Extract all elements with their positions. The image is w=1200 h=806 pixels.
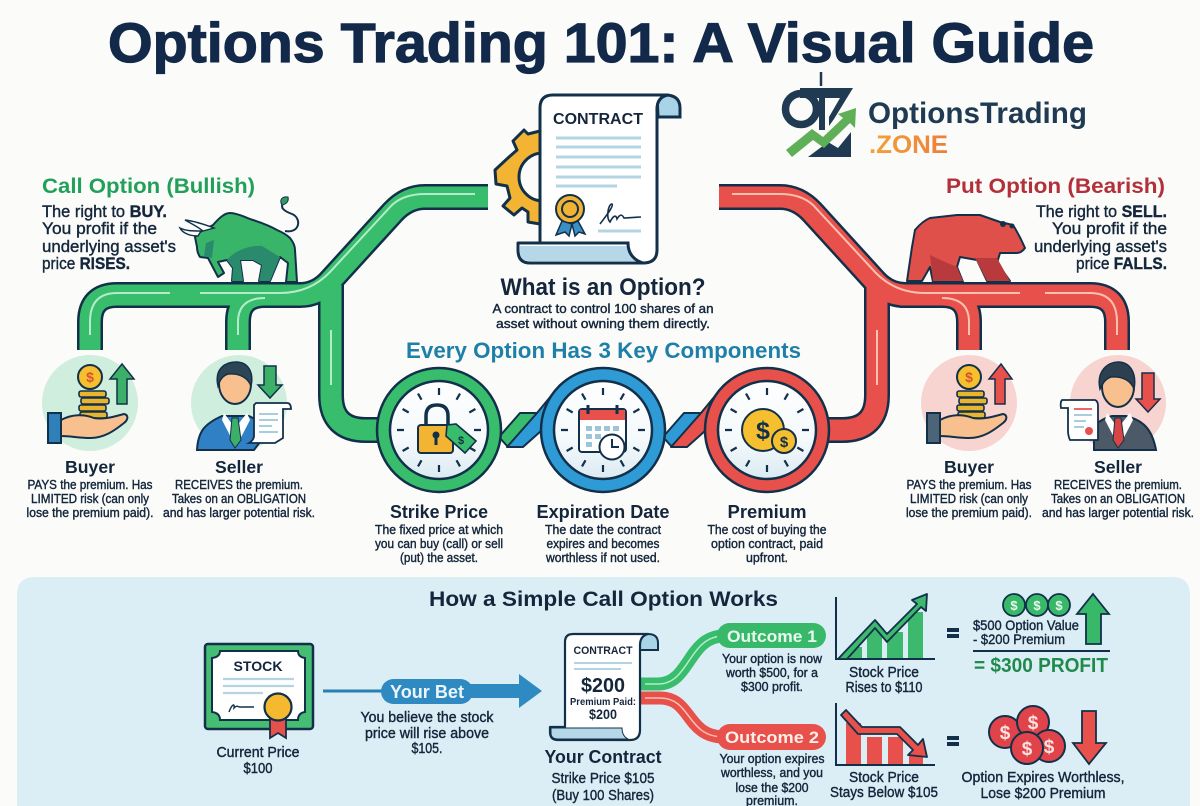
- panel: how a simple call option works: [17, 577, 1190, 806]
- label: stays below 105: [830, 770, 938, 801]
- text: outcome 2 description: Your option expires: [720, 752, 824, 766]
- icon: red coins: $: [1044, 737, 1055, 758]
- text: put seller description: [1042, 478, 1194, 520]
- icon: premium dial: $: [756, 417, 770, 445]
- icon: small contract: CONTRACT: [574, 645, 633, 657]
- text: premium description: [708, 523, 827, 565]
- text: premium description: option contract, paid: [711, 537, 823, 551]
- logo wordmark: OptionsTrading: [868, 97, 1087, 130]
- text: strike price description: The fixed price at which: [375, 523, 503, 537]
- chart: stock price rises: [836, 594, 935, 696]
- text: outcome 1 description: [722, 652, 823, 694]
- equals sign: outcome 2: [947, 736, 959, 746]
- logo zone: .ZONE: [869, 131, 948, 159]
- label: stays below 105: Stock Price: [849, 770, 919, 786]
- text: call buyer description: [26, 478, 154, 520]
- equals sign: outcome 1: [947, 628, 959, 638]
- badge: outcome 2: Outcome 2: [725, 728, 819, 747]
- icon: put buyer: $: [965, 369, 973, 385]
- pipes: put option red: [719, 194, 1117, 430]
- divider and profit result: = $300 PROFIT: [974, 655, 1108, 677]
- icon: strike price dial: $: [458, 435, 464, 447]
- text: strike price description: you can buy (call) or sell: [375, 537, 503, 551]
- label: expiration date: Expiration Date: [536, 502, 670, 522]
- outcome 2: [717, 724, 826, 806]
- heading: key components: Every Option Has 3 Key Components: [406, 338, 801, 363]
- icon: call buyer: $: [86, 369, 94, 385]
- icon: small contract: $200: [589, 707, 617, 722]
- heading: put option: Put Option (Bearish): [946, 175, 1165, 198]
- label: premium: Premium: [728, 502, 806, 522]
- your bet: [323, 674, 542, 757]
- label: call seller: Seller: [215, 457, 263, 477]
- text: expiration description: worthless if not used.: [545, 551, 660, 565]
- icon: gear and contract: [495, 95, 680, 263]
- label: put buyer: Buyer: [944, 457, 994, 477]
- text: call buyer description: LIMITED risk (can only: [31, 492, 150, 506]
- logo mark: [786, 72, 856, 157]
- label: put seller: Seller: [1094, 457, 1142, 477]
- text: expiration description: The date the contract: [545, 523, 662, 537]
- panel background: [17, 577, 1190, 806]
- text: outcome 1 description: $300 profit.: [741, 680, 803, 694]
- bars and trend arrow falling: [836, 703, 935, 765]
- label: call buyer: Buyer: [65, 457, 115, 477]
- pipes: call option green: [90, 194, 488, 430]
- bars and trend arrow rising: [836, 594, 935, 659]
- icon: call buyer: [42, 355, 138, 451]
- icon: bear: [907, 215, 1025, 282]
- icon: put buyer: [921, 355, 1017, 451]
- profit calculation: [973, 594, 1110, 677]
- badge: outcome 1: Outcome 1: [727, 627, 817, 646]
- arrow: your bet: Your Bet: [390, 682, 464, 702]
- text: current price: Current Price: [216, 745, 300, 761]
- text: put seller description: and has larger potential risk.: [1042, 506, 1194, 520]
- text: call option description: price RISES.: [42, 254, 130, 273]
- text: outcome 2 description: [720, 752, 824, 806]
- text: call buyer description: lose the premium paid).: [26, 506, 154, 520]
- icon: red coins: $: [1028, 713, 1039, 734]
- text: call seller description: [163, 478, 315, 520]
- outcome pipes: [640, 636, 724, 737]
- icon: red coins: $: [1000, 723, 1011, 744]
- component: strike price: [375, 368, 503, 565]
- label: rises to 110: Stock Price: [849, 665, 919, 681]
- text: call seller description: Takes on an OBLIGATION: [172, 492, 306, 506]
- text: put option description: price FALLS.: [1076, 254, 1167, 273]
- text: strike price description: [375, 523, 503, 565]
- text: expiration description: [545, 523, 662, 565]
- text: outcome 2 description: worthless, and you: [720, 766, 823, 780]
- label: rises to 110: Rises to $110: [846, 680, 922, 696]
- text: call option description: The right to BUY.: [42, 202, 167, 221]
- arrow: profit up: [1077, 594, 1109, 644]
- icon: put seller: [1061, 355, 1166, 451]
- text: your bet description: [360, 710, 494, 757]
- text: calculation: - $200 Premium: [973, 631, 1065, 647]
- text: strike details: Strike Price $105: [552, 771, 654, 787]
- text: call option description: You profit if the: [42, 219, 157, 238]
- text: your bet description: price will rise above: [365, 726, 489, 742]
- icon: stock certificate: STOCK: [234, 658, 282, 674]
- text: put buyer description: LIMITED risk (can only: [910, 492, 1029, 506]
- text: calculation: [973, 617, 1079, 647]
- call seller: [163, 355, 315, 520]
- heading: what is an option: What is an Option?: [500, 274, 706, 301]
- text: your bet description: $105.: [412, 741, 442, 757]
- text: premium description: upfront.: [746, 551, 788, 565]
- heading: how it works: How a Simple Call Option Works: [429, 588, 778, 611]
- outcome 1: [717, 623, 826, 694]
- text: put buyer description: PAYS the premium. Has: [906, 478, 1032, 492]
- text: your bet description: You believe the stock: [360, 710, 494, 726]
- arrow: loss down: [1073, 711, 1106, 764]
- text: put option description: underlying asset's: [1034, 237, 1167, 256]
- icon: gear: [495, 130, 567, 224]
- text: loss result: Lose $200 Premium: [980, 785, 1106, 802]
- icon: red coins: $: [1022, 739, 1033, 760]
- label: your contract: Your Contract: [544, 747, 662, 767]
- put buyer: [906, 355, 1032, 520]
- text: call seller description: and has larger potential risk.: [163, 506, 315, 520]
- connector bands between components: [499, 385, 742, 447]
- text: put seller description: Takes on an OBLIGATION: [1051, 492, 1185, 506]
- text: current price: $100: [244, 761, 272, 777]
- text: call option description: underlying asset's: [42, 237, 176, 256]
- icon: green coins: [1003, 594, 1070, 616]
- icon: strike price dial: [377, 368, 501, 492]
- icon: expiration dial: [541, 368, 665, 492]
- icon: contract document: CONTRACT: [553, 111, 644, 128]
- panel: put option text: [946, 175, 1167, 273]
- text: definition: asset without owning them directly.: [496, 316, 710, 331]
- text: premium description: The cost of buying the: [708, 523, 827, 537]
- label: stays below 105: Stays Below $105: [830, 785, 938, 801]
- chart: stock price falls: [830, 703, 938, 801]
- text: put buyer description: [906, 478, 1032, 520]
- text: put buyer description: lose the premium paid).: [906, 506, 1032, 520]
- text: put option description: You profit if the: [1052, 219, 1167, 238]
- title: Options Trading 101: A Visual Guide: [108, 11, 1094, 74]
- panel: call option text: [42, 175, 255, 273]
- your contract: [544, 634, 662, 804]
- call buyer: [26, 355, 154, 520]
- text: strike details: (Buy 100 Shares): [552, 788, 654, 804]
- text: outcome 2 description: lose the $200: [736, 781, 809, 795]
- text: current price: [216, 745, 300, 777]
- icon: premium dial: $: [780, 434, 789, 451]
- text: call option description: [42, 202, 176, 273]
- icon: bull: [180, 197, 298, 282]
- component: premium: [705, 368, 829, 565]
- text: definition: A contract to control 100 shares of an: [492, 301, 714, 316]
- text: loss result: [962, 769, 1124, 802]
- loss result: [962, 706, 1124, 802]
- text: calculation: $500 Option Value: [973, 617, 1079, 633]
- icon: premium dial: [705, 368, 829, 492]
- text: strike details: [552, 771, 654, 804]
- icon: green coins: $: [1033, 598, 1041, 613]
- text: what is an option: [492, 274, 714, 331]
- label: rises to 110: [846, 665, 922, 696]
- icon: small contract: Premium Paid:: [570, 696, 636, 708]
- logo: [786, 72, 1087, 159]
- stock certificate: [205, 644, 313, 777]
- component: expiration date: [536, 368, 670, 565]
- text: loss result: Option Expires Worthless,: [962, 769, 1124, 786]
- text: definition: [492, 301, 714, 331]
- icon: green coins: $: [1010, 598, 1018, 613]
- text: put option description: The right to SELL.: [1036, 202, 1167, 221]
- icon: contract document: [518, 95, 680, 263]
- text: put seller description: RECEIVES the premium.: [1054, 478, 1182, 492]
- arrow: your bet: [323, 674, 542, 708]
- label: strike price: Strike Price: [390, 502, 488, 522]
- text: outcome 1 description: Your option is now: [722, 652, 823, 666]
- icon: small contract: [550, 634, 658, 740]
- text: call seller description: RECEIVES the premium.: [175, 478, 303, 492]
- text: strike price description: (put) the asset.: [400, 551, 478, 565]
- text: outcome 1 description: worth $500, for a: [725, 666, 818, 680]
- text: expiration description: expires and becomes: [546, 537, 660, 551]
- icon: green coins: $: [1055, 598, 1063, 613]
- icon: small contract: $200: [581, 675, 625, 697]
- text: put option description: [1034, 202, 1167, 273]
- text: call buyer description: PAYS the premium. Has: [28, 478, 152, 492]
- heading: call option: Call Option (Bullish): [42, 175, 255, 198]
- icon: call seller: [191, 355, 291, 451]
- icon: red coins: [989, 706, 1065, 764]
- put seller: [1042, 355, 1194, 520]
